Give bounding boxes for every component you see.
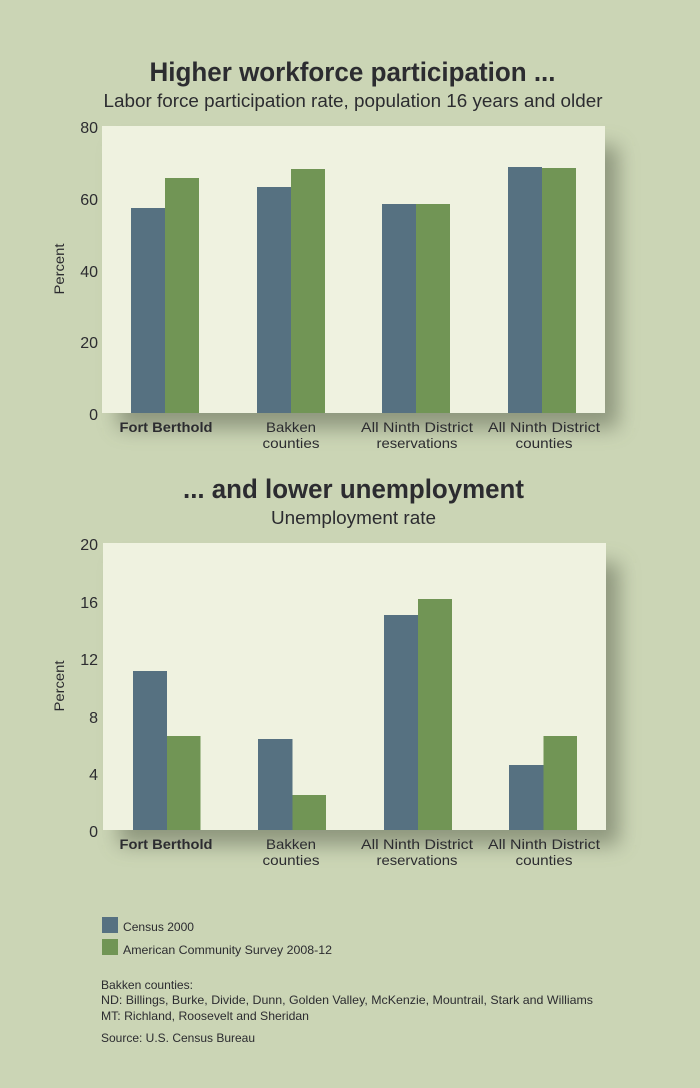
category labels: counties — [262, 852, 320, 868]
notes: Bakken counties: ND: Billings, Burke, Divide, Dunn, Golden Valley, McKenzie, Mountrail, Stark and Williams — [101, 993, 593, 1007]
legend: American Community Survey 2008-12 — [123, 943, 332, 957]
bars: counties — [508, 167, 576, 413]
category labels — [120, 419, 600, 451]
chart: labor force participation — [52, 120, 618, 451]
y axis ticks: 16 — [80, 595, 98, 612]
y axis ticks: 0 — [89, 407, 98, 424]
y axis label: Percent — [52, 660, 67, 712]
bars: Fort Berthold — [131, 178, 199, 413]
category labels: counties — [516, 435, 572, 451]
category labels: Fort Berthold — [120, 836, 212, 852]
notes: Bakken counties: MT: Richland, Roosevelt and Sheridan — [101, 1009, 309, 1023]
category labels: Bakken — [266, 836, 316, 852]
subtitle: bottom chart: Unemployment rate — [271, 507, 436, 528]
y axis ticks: 60 — [80, 192, 98, 209]
category labels: All Ninth District — [488, 419, 600, 435]
y axis label: Percent — [52, 243, 67, 294]
title: top chart: Higher workforce participation ... — [150, 57, 556, 87]
bars: counties — [509, 736, 577, 830]
bars: reservations — [384, 599, 452, 830]
y axis ticks: 8 — [89, 710, 98, 727]
y axis ticks: 4 — [89, 767, 98, 784]
y axis ticks: 20 — [80, 537, 98, 554]
category labels — [120, 836, 600, 868]
bars: reservations — [382, 204, 450, 413]
category labels: Bakken — [266, 419, 316, 435]
legend — [102, 917, 332, 957]
y axis ticks: 40 — [80, 264, 98, 281]
category labels: All Ninth District — [488, 836, 600, 852]
notes: Bakken counties: Bakken counties: — [101, 978, 193, 992]
source: Source: U.S. Census Bureau — [101, 1031, 255, 1045]
bars: Bakken counties — [258, 739, 326, 830]
category labels: Fort Berthold — [120, 419, 212, 435]
bars: Fort Berthold — [133, 671, 200, 830]
y axis ticks: 12 — [80, 652, 98, 669]
y axis ticks — [80, 120, 98, 424]
subtitle: top chart: Labor force participation rate, population 16 years and older — [104, 90, 602, 111]
y axis ticks: 80 — [80, 120, 98, 137]
category labels: All Ninth District — [361, 836, 473, 852]
y axis ticks: 20 — [80, 335, 98, 352]
category labels: reservations — [376, 852, 458, 868]
bars: Bakken counties — [257, 169, 325, 413]
category labels: counties — [516, 852, 572, 868]
title: bottom chart: ... and lower unemployment — [183, 474, 524, 504]
notes: Bakken counties — [101, 978, 593, 1023]
y axis ticks — [80, 537, 98, 841]
legend: Census 2000 — [123, 920, 194, 934]
category labels: counties — [262, 435, 320, 451]
y axis ticks: 0 — [89, 824, 98, 841]
chart: unemployment — [52, 537, 619, 868]
category labels: reservations — [376, 435, 458, 451]
category labels: All Ninth District — [361, 419, 473, 435]
